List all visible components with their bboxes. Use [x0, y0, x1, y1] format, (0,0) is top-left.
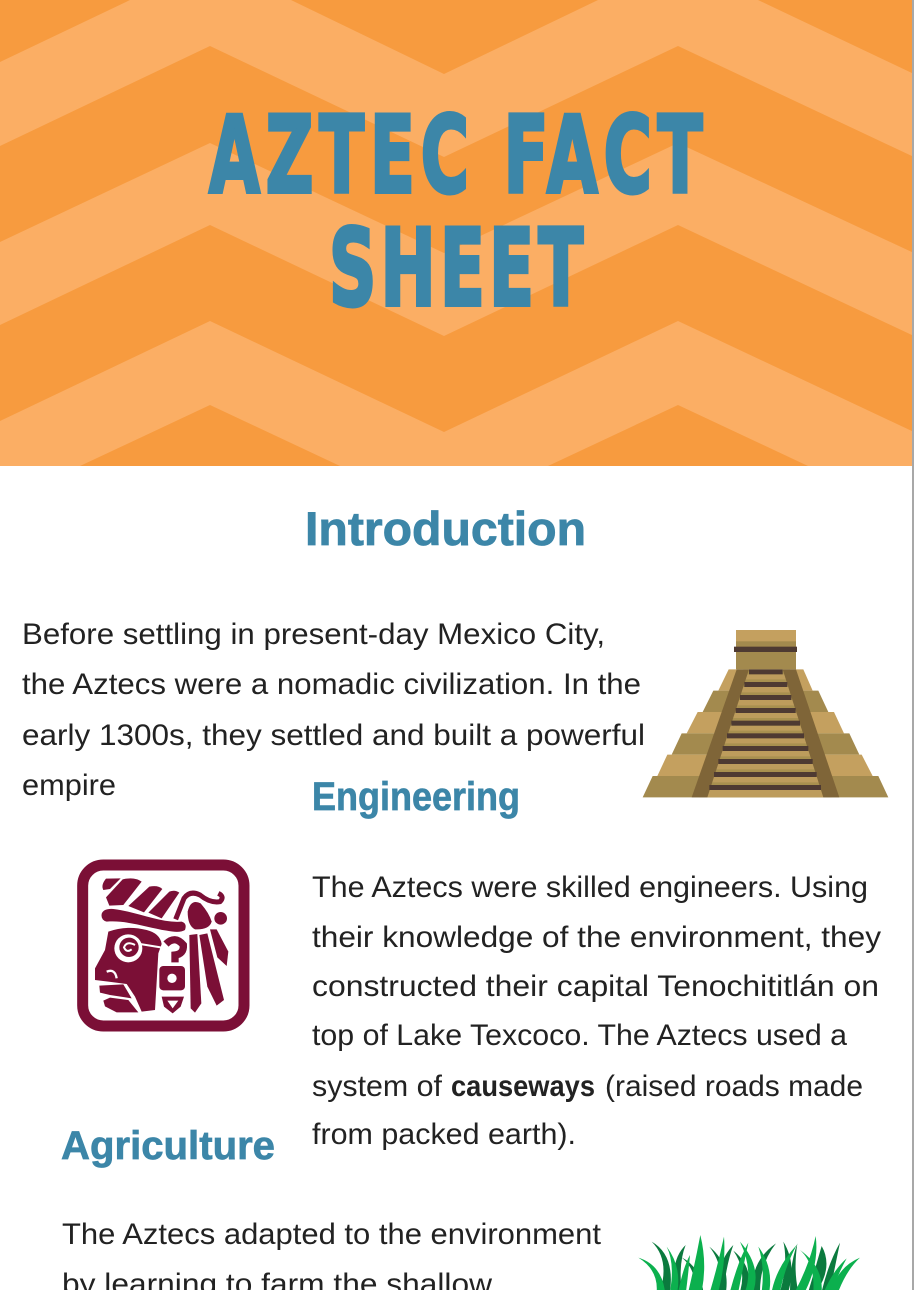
title [209, 93, 703, 330]
text block: agriculture: The Aztecs adapted to the environment [62, 1218, 602, 1251]
text block: engineering: causeways [451, 1070, 595, 1103]
text block: engineering: from packed earth). [312, 1118, 576, 1151]
text block: agriculture [62, 1218, 602, 1290]
text block: engineering: constructed their capital Tenochititlán on [312, 970, 879, 1003]
header banner with chevron pattern [0, 0, 914, 466]
text block: introduction: empire [22, 769, 116, 802]
text block: introduction: the Aztecs were a nomadic civilization. In the [22, 668, 641, 701]
text block: engineering: their knowledge of the environment, they [312, 921, 881, 954]
icon: Aztec warrior glyph [83, 865, 244, 1026]
text block: engineering: (raised roads made [605, 1070, 863, 1103]
heading: Agriculture: Agriculture [61, 1124, 275, 1168]
title: AZTEC FACT [209, 93, 703, 217]
text block: engineering [312, 871, 881, 1151]
title: SHEET [329, 206, 583, 330]
heading: Introduction: Introduction [305, 502, 586, 555]
heading: Engineering: Engineering [312, 775, 520, 819]
text block: engineering: The Aztecs were skilled engineers. Using [312, 871, 868, 904]
text block: introduction: Before settling in present-day Mexico City, [22, 618, 605, 651]
text block: introduction: early 1300s, they settled and built a powerful [22, 719, 645, 752]
text block: introduction [22, 618, 645, 802]
text block: engineering: top of Lake Texcoco. The Aztecs used a [312, 1019, 847, 1052]
icon: grass [638, 1235, 860, 1290]
text block: engineering: system of [312, 1070, 443, 1103]
page edge line [912, 0, 914, 1290]
icon: stepped pyramid [643, 630, 888, 797]
